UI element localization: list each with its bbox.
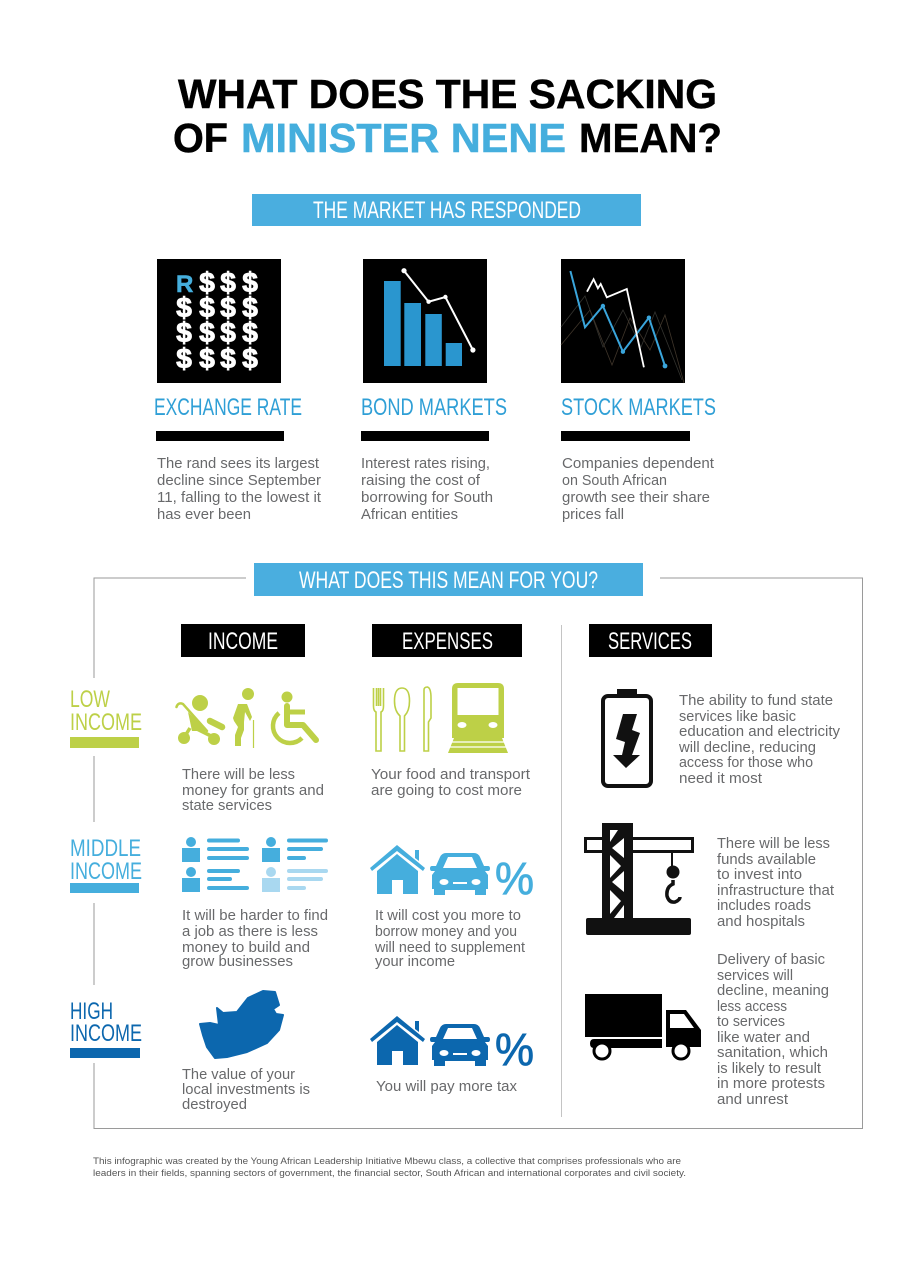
text: bond markets: African entities	[361, 506, 458, 523]
icon: house, car, percent (middle income)	[370, 845, 534, 904]
icon: battery	[603, 689, 651, 786]
icon: house, car, percent (high income): %	[495, 1024, 534, 1075]
text: stock markets: prices fall	[562, 506, 624, 523]
icon: currency grid: $	[176, 292, 192, 323]
text: middle income, income: money to build and	[182, 939, 310, 956]
text: state services	[678, 692, 840, 787]
column header: expenses	[372, 624, 522, 657]
icon: currency grid: $	[220, 292, 236, 323]
text: exchange rate: decline since September	[157, 472, 321, 489]
icon: currency grid: R	[176, 271, 193, 298]
banner: what does this mean for you	[254, 563, 643, 596]
text: service delivery: less access	[717, 998, 787, 1015]
text: service delivery: is likely to result	[717, 1060, 822, 1077]
heading: exchange rate: EXCHANGE RATE	[154, 394, 302, 421]
icon: stock lines	[561, 259, 685, 383]
icon: people and job lines	[182, 837, 328, 892]
footer credit: leaders in their fields, spanning sectors of government, the financial sector, South African and international corporates and civil society.	[93, 1168, 686, 1178]
row label: high income: INCOME	[70, 1020, 142, 1047]
text: high income, income: local investments is	[182, 1081, 310, 1098]
row label: middle income	[70, 835, 142, 893]
text: state services: need it most	[679, 770, 763, 787]
banner: the market has responded	[252, 194, 641, 226]
icon: house, car, percent (middle income): %	[495, 853, 534, 904]
icon: currency grid: $	[176, 343, 192, 374]
text: middle income, income: grow businesses	[182, 953, 293, 970]
row label: high income: HIGH	[70, 998, 113, 1025]
text: infrastructure: infrastructure that	[717, 882, 835, 899]
text: state services: will decline, reducing	[678, 739, 816, 756]
icon: stroller, elderly person, wheelchair	[176, 688, 316, 748]
row label: low income	[70, 686, 142, 748]
icon: house, car, percent (high income)	[370, 1016, 534, 1075]
text: low income, income: state services	[182, 797, 272, 814]
footer credit	[93, 1156, 686, 1178]
text: exchange rate: 11, falling to the lowest it	[157, 489, 322, 506]
text: high income, income	[182, 1066, 310, 1113]
text: service delivery: decline, meaning	[717, 982, 829, 999]
text: stock markets: Companies dependent	[562, 455, 715, 472]
title: WHAT DOES THE SACKING	[178, 71, 717, 117]
row label: middle income: MIDDLE	[70, 835, 141, 862]
text: high income, income: The value of your	[182, 1066, 295, 1083]
icon: currency grid: $	[199, 267, 215, 298]
icon: delivery truck	[585, 994, 701, 1059]
text: service delivery	[717, 951, 829, 1108]
icon: currency grid: $	[242, 317, 258, 348]
text: service delivery: in more protests	[717, 1075, 825, 1092]
text: low income, income: money for grants and	[182, 782, 324, 799]
text: stock markets	[562, 455, 715, 523]
icon: currency grid: $	[242, 292, 258, 323]
text: middle income, income	[182, 907, 328, 970]
text: low income, expenses: Your food and transport	[371, 766, 531, 783]
text: middle income, expenses: will need to supplement	[374, 939, 526, 956]
column header: services: SERVICES	[608, 628, 692, 655]
icon: currency grid: $	[176, 317, 192, 348]
text: low income, income: There will be less	[182, 766, 295, 783]
icon: currency grid: $	[220, 267, 236, 298]
text: infrastructure: includes roads	[717, 897, 811, 914]
heading: bond markets: BOND MARKETS	[361, 394, 507, 421]
text: high income, income: destroyed	[182, 1096, 247, 1113]
text: stock markets: growth see their share	[562, 489, 710, 506]
text: service delivery: and unrest	[717, 1091, 789, 1108]
footer credit: This infographic was created by the Young African Leadership Initiative Mbewu class, a collective that comprises professionals who are	[93, 1156, 681, 1166]
icon: map of South Africa	[200, 991, 283, 1058]
text: infrastructure	[717, 835, 835, 930]
text: middle income, expenses: your income	[375, 953, 455, 970]
column header: income	[181, 624, 305, 657]
icon: currency grid: $	[220, 317, 236, 348]
title: MEAN?	[579, 115, 722, 161]
text: bond markets: raising the cost of	[361, 472, 481, 489]
text: exchange rate: The rand sees its largest	[157, 455, 320, 472]
icon: currency grid: $	[199, 317, 215, 348]
text: infrastructure: and hospitals	[717, 913, 805, 930]
text: stock markets: on South African	[562, 472, 667, 489]
text: infrastructure: funds available	[717, 851, 816, 868]
text: state services: education and electricity	[679, 723, 840, 740]
icon: currency grid: $	[199, 292, 215, 323]
row label: low income: INCOME	[70, 709, 142, 736]
text: middle income, expenses: It will cost you more to	[375, 907, 521, 924]
text: service delivery: sanitation, which	[717, 1044, 828, 1061]
row label: low income: LOW	[70, 686, 110, 713]
text: service delivery: to services	[717, 1013, 785, 1030]
text: bond markets	[361, 455, 493, 523]
title: OF	[173, 115, 228, 161]
text: service delivery: like water and	[717, 1029, 810, 1046]
row label: middle income: INCOME	[70, 858, 142, 885]
text: low income, income	[182, 766, 324, 814]
text: middle income, income: It will be harder to find	[182, 907, 328, 924]
text: state services: The ability to fund state	[679, 692, 833, 709]
text: service delivery: Delivery of basic	[717, 951, 825, 968]
text: low income, expenses	[371, 766, 531, 799]
icon: currency grid: $	[242, 343, 258, 374]
banner: the market has responded: THE MARKET HAS RESPONDED	[313, 197, 581, 224]
icon: currency grid	[157, 259, 281, 383]
icon: cutlery and train	[374, 683, 508, 753]
text: low income, expenses: are going to cost more	[371, 782, 522, 799]
text: state services: services like basic	[679, 708, 796, 725]
panel: stock markets	[561, 259, 716, 523]
text: service delivery: services will	[717, 967, 793, 984]
icon: crane	[586, 823, 692, 935]
panel: bond markets	[361, 259, 507, 523]
text: middle income, expenses	[374, 907, 526, 970]
text: exchange rate: has ever been	[157, 506, 251, 523]
heading: stock markets: STOCK MARKETS	[561, 394, 716, 421]
text: exchange rate	[157, 455, 322, 523]
icon: currency grid: $	[199, 343, 215, 374]
text: high income, expenses: You will pay more tax	[376, 1078, 517, 1095]
text: bond markets: borrowing for South	[361, 489, 493, 506]
icon: currency grid: $	[242, 267, 258, 298]
icon: falling bar chart	[363, 259, 487, 383]
panel: exchange rate	[154, 259, 322, 523]
banner: what does this mean for you: WHAT DOES THIS MEAN FOR YOU?	[299, 567, 598, 594]
text: middle income, expenses: borrow money and you	[375, 923, 517, 940]
text: middle income, income: a job as there is less	[182, 923, 318, 940]
title: MINISTER NENE	[241, 115, 566, 161]
text: infrastructure: There will be less	[717, 835, 830, 852]
column header: expenses: EXPENSES	[402, 628, 493, 655]
text: bond markets: Interest rates rising,	[361, 455, 490, 472]
column header: income: INCOME	[208, 628, 278, 655]
text: infrastructure: to invest into	[717, 866, 802, 883]
column header: services	[589, 624, 712, 657]
row label: high income	[70, 998, 142, 1058]
text: state services: access for those who	[679, 754, 813, 771]
title	[173, 71, 722, 161]
icon: currency grid: $	[220, 343, 236, 374]
